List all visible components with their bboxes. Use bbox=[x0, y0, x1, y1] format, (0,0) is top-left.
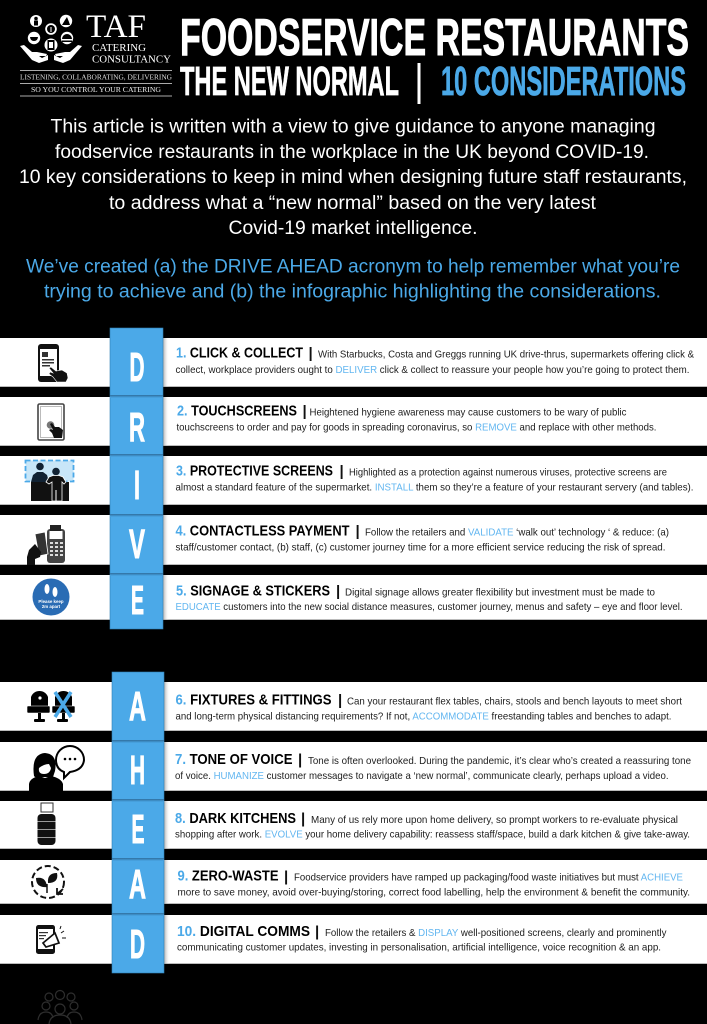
item 10: digital comms: | bbox=[315, 924, 319, 940]
item 5: signage and stickers: | bbox=[336, 583, 340, 600]
item 3: protective screens: Highlighted as a protection against numerous viruses, protective screens are bbox=[349, 468, 667, 479]
panel: DRIVE column: I bbox=[134, 462, 140, 508]
panel: DRIVE column bbox=[110, 328, 163, 629]
panel: AHEAD column: H bbox=[130, 747, 145, 793]
icon: bench seating with cross bbox=[27, 691, 75, 722]
item 9: zero-waste: | bbox=[284, 868, 288, 886]
item 10: digital comms: 10. DIGITAL COMMS bbox=[177, 924, 310, 940]
intro text block: foodservice restaurants in the workplace in the UK beyond COVID-19. bbox=[55, 142, 649, 163]
icon: faint crowd bbox=[38, 990, 82, 1024]
item 4: contactless payment: | bbox=[356, 523, 360, 540]
logo sub-name: CATERING bbox=[92, 43, 146, 54]
icon: person with speech bubble bbox=[29, 746, 84, 793]
logo tagline bbox=[20, 72, 173, 94]
item 7: tone of voice: 7. TONE OF VOICE bbox=[175, 752, 293, 768]
item 4: contactless payment: 4. CONTACTLESS PAYMENT bbox=[176, 524, 350, 540]
item 8: dark kitchens: | bbox=[301, 810, 305, 828]
logo sub-name: CONSULTANCY bbox=[92, 54, 171, 66]
item 1: click and collect bbox=[176, 345, 694, 376]
item 9: zero-waste bbox=[178, 868, 690, 898]
item 7: tone of voice: of voice. HUMANIZE customer messages to navigate a ‘new normal’, communicate clearly, perhaps upload a video. bbox=[175, 771, 668, 782]
icon: tiffin stack bbox=[38, 803, 56, 845]
intro text block: Covid-19 market intelligence. bbox=[228, 218, 478, 239]
item 2: touchscreens: Heightened hygiene awareness may cause customers to be wary of public bbox=[310, 408, 626, 419]
item 2: touchscreens: 2. TOUCHSCREENS bbox=[177, 404, 297, 420]
item 6: fixtures and fittings: and long-term physical distancing requirements? If not, ACCOMMODATE freestanding tables and benches to adapt. bbox=[176, 712, 672, 722]
item 5: signage and stickers bbox=[176, 583, 682, 613]
panel: AHEAD column: A bbox=[129, 861, 146, 907]
item 4: contactless payment: staff/customer contact, (b) staff, (c) customer journey time for a more efficient service reducing the risk of spread. bbox=[176, 542, 666, 554]
panel: DRIVE column: E bbox=[131, 577, 144, 623]
item 6: fixtures and fittings: 6. FIXTURES & FITTINGS bbox=[176, 692, 332, 708]
item 10: digital comms: Follow the retailers & DISPLAY well-positioned screens, clearly and prominently bbox=[325, 928, 667, 939]
item 6: fixtures and fittings: Can your restaurant flex tables, chairs, stools and bench layouts to meet short bbox=[347, 696, 682, 707]
item 10: digital comms: communicating customer updates, investing in personalisation, artificial intelligence, voice recognition & an app. bbox=[177, 942, 661, 954]
icon: social distance sign: 2m apart bbox=[42, 604, 61, 609]
icon: touchscreen tablet bbox=[38, 404, 64, 440]
item 1: click and collect: | bbox=[308, 345, 313, 362]
logo: TAF Catering Consultancy bbox=[20, 9, 173, 96]
item 8: dark kitchens: 8. DARK KITCHENS bbox=[175, 811, 296, 827]
item 8: dark kitchens bbox=[175, 810, 690, 841]
item 6: fixtures and fittings: | bbox=[338, 692, 342, 709]
logo tagline: SO YOU CONTROL YOUR CATERING bbox=[31, 85, 162, 94]
item 6: fixtures and fittings bbox=[176, 692, 682, 722]
subtitle: THE NEW NORMAL bbox=[180, 58, 399, 104]
logo tagline: LISTENING, COLLABORATING, DELIVERING bbox=[20, 72, 173, 82]
item 5: signage and stickers: Digital signage allows greater flexibility but investment must be made to bbox=[345, 587, 655, 598]
item 9: zero-waste: more to save money, avoid over-buying/storing, correct food labelling, help the environment & benefit the community. bbox=[178, 888, 690, 898]
item 3: protective screens bbox=[176, 463, 694, 494]
logo wordmark: TAF bbox=[86, 9, 146, 45]
panel: DRIVE column: V bbox=[129, 521, 145, 567]
icon: contactless payment terminal bbox=[27, 525, 65, 565]
icon: zero waste leaf bbox=[32, 866, 64, 898]
item 2: touchscreens bbox=[176, 403, 656, 434]
item 2: touchscreens: | bbox=[302, 403, 307, 420]
acronym explanation: We’ve created (a) the DRIVE AHEAD acronym to help remember what you’re bbox=[26, 257, 680, 278]
item 9: zero-waste: Foodservice providers have ramped up packaging/food waste initiatives but must ACHIEVE bbox=[294, 873, 683, 884]
item 5: signage and stickers: 5. SIGNAGE & STICKERS bbox=[176, 583, 330, 599]
item 1: click and collect: 1. CLICK & COLLECT bbox=[176, 346, 303, 362]
item 8: dark kitchens: Many of us rely more upon home delivery, so prompt workers to re-evaluate physical bbox=[311, 815, 678, 826]
panel: row backgrounds bbox=[0, 338, 707, 964]
item 3: protective screens: | bbox=[340, 463, 344, 480]
logo sub-name bbox=[92, 43, 171, 66]
panel: DRIVE column: D bbox=[130, 344, 144, 390]
panel: AHEAD column: D bbox=[130, 921, 145, 967]
icon: food circles bbox=[28, 15, 73, 52]
item 7: tone of voice: Tone is often overlooked. During the pandemic, it’s clear who’s created a reassuring tone bbox=[308, 756, 691, 767]
item 2: touchscreens: touchscreens to order and pay for goods in spreading coronavirus, so REMOVE and replace with other methods. bbox=[176, 422, 656, 434]
icon: social distance sign: Please keep bbox=[38, 599, 64, 604]
item 1: click and collect: collect, workplace providers ought to DELIVER click & collect to reassure your people how you’re going to protect them. bbox=[176, 365, 690, 376]
panel: DRIVE column: R bbox=[129, 404, 145, 450]
item 10: digital comms bbox=[177, 924, 667, 954]
item 7: tone of voice: | bbox=[298, 752, 302, 768]
icon: social distance sign bbox=[32, 578, 70, 616]
acronym explanation: trying to achieve and (b) the infographic highlighting the considerations. bbox=[44, 282, 661, 303]
panel: AHEAD column: A bbox=[129, 683, 146, 729]
intro text block: This article is written with a view to give guidance to anyone managing bbox=[50, 117, 656, 138]
item 7: tone of voice bbox=[175, 752, 691, 782]
icon: protective screen at counter bbox=[26, 460, 74, 501]
item 4: contactless payment: Follow the retailers and VALIDATE ‘walk out’ technology ‘ & reduce: (a) bbox=[365, 528, 669, 539]
intro text block: 10 key considerations to keep in mind when designing future staff restaurants, bbox=[19, 167, 687, 188]
panel: AHEAD column bbox=[112, 672, 164, 973]
item 9: zero-waste: 9. ZERO-WASTE bbox=[178, 869, 279, 885]
item 3: protective screens: 3. PROTECTIVE SCREENS bbox=[176, 464, 333, 480]
intro text block bbox=[19, 117, 687, 239]
item 3: protective screens: almost a standard feature of the supermarket. INSTALL them so they’re a feature of your restaurant servery (and tables). bbox=[176, 482, 694, 494]
item 4: contactless payment bbox=[176, 523, 669, 554]
icon: phone with megaphone bbox=[36, 925, 66, 954]
panel: AHEAD column: E bbox=[132, 806, 144, 852]
item 8: dark kitchens: shopping after work. EVOLVE your home delivery capability: reassess staff/space, build a dark kitchen & give take-away. bbox=[175, 830, 690, 841]
icon: phone click and collect bbox=[38, 344, 68, 382]
intro text block: to address what a “new normal” based on the very latest bbox=[109, 193, 597, 214]
icon: cupped hands bbox=[20, 45, 82, 63]
acronym explanation bbox=[26, 257, 680, 303]
item 5: signage and stickers: EDUCATE customers into the new social distance measures, customer journey, menus and safety – eye and floor level. bbox=[176, 602, 682, 613]
